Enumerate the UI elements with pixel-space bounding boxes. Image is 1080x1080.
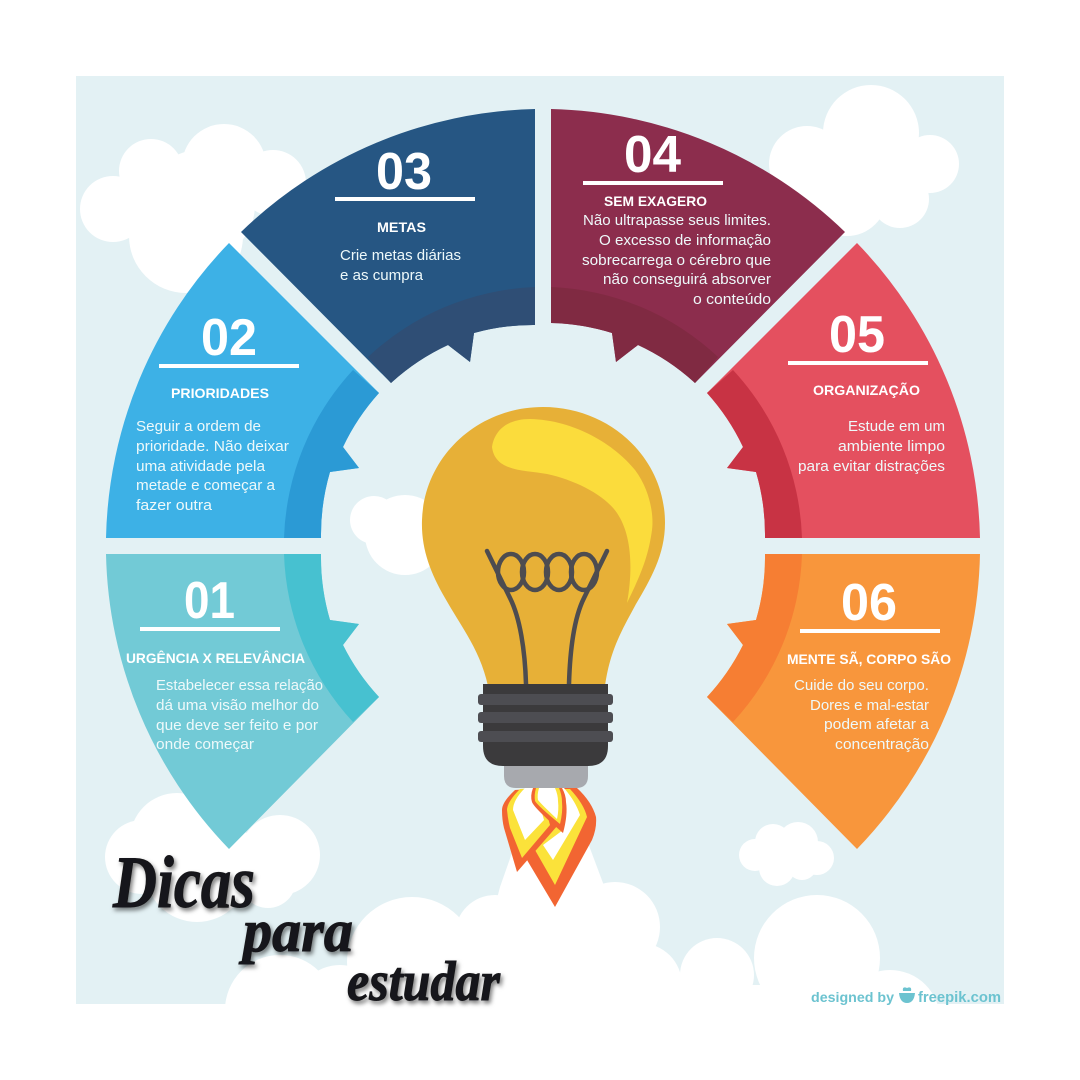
text 02: prioridade. Não deixar <box>136 438 289 455</box>
rule 03 <box>335 197 475 201</box>
text 01: onde começar <box>156 736 254 753</box>
flames <box>502 788 596 907</box>
text 05: ambiente limpo <box>838 438 945 455</box>
text 05 <box>798 418 945 475</box>
screw ridges <box>478 694 613 742</box>
rule 02 <box>159 364 299 368</box>
screw base <box>483 684 608 766</box>
number 04: 04 <box>624 126 681 184</box>
cloud: top left <box>80 124 306 293</box>
credit: designed by freepik: freepik.com <box>918 989 1001 1006</box>
neck <box>504 760 588 788</box>
rule 05 <box>788 361 928 365</box>
text 02: fazer outra <box>136 497 213 514</box>
number 02: 02 <box>201 309 257 367</box>
text 06: Cuide do seu corpo. <box>794 677 929 694</box>
icon: freepik logo <box>899 987 915 1003</box>
text 04: não conseguirá absorver <box>603 271 771 288</box>
rule 06 <box>800 629 940 633</box>
clouds <box>80 85 959 1070</box>
number 03: 03 <box>376 143 432 201</box>
cloud: bottom with rocket smoke <box>225 846 938 1004</box>
text 02: metade e começar a <box>136 477 276 494</box>
bulb glass <box>422 407 665 686</box>
background panel <box>76 76 1004 1004</box>
text 06: Dores e mal-estar <box>810 697 929 714</box>
text 03 <box>340 247 461 284</box>
text 02: Seguir a ordem de <box>136 418 261 435</box>
rule 01 <box>140 627 280 631</box>
text 01 <box>156 677 323 753</box>
number 01: 01 <box>184 572 235 630</box>
title 02: PRIORIDADES <box>171 385 269 401</box>
text 04 <box>582 212 771 308</box>
bulb highlight <box>492 419 652 603</box>
text 04: O excesso de informação <box>599 232 771 249</box>
title 06: MENTE SÃ, CORPO SÃO <box>787 650 951 667</box>
text 04: Não ultrapasse seus limites. <box>583 212 771 229</box>
credit: designed by freepik: designed by <box>811 989 894 1005</box>
credit: designed by freepik <box>811 987 1001 1006</box>
title 01: URGÊNCIA X RELEVÂNCIA <box>126 649 305 666</box>
text 01: que deve ser feito e por <box>156 717 318 734</box>
text 01: dá uma visão melhor do <box>156 697 319 714</box>
text 06: podem afetar a <box>824 716 930 733</box>
segment 03 <box>241 109 535 383</box>
segment 02 <box>106 243 379 538</box>
text 05: para evitar distrações <box>798 458 945 475</box>
title: Dicas para estudar <box>112 842 501 1013</box>
filament <box>487 551 607 684</box>
number 06: 06 <box>841 574 897 632</box>
segment 06 <box>707 554 980 849</box>
text 02: uma atividade pela <box>136 458 266 475</box>
segment 04 <box>551 109 845 383</box>
text 05: Estude em um <box>848 418 945 435</box>
title 05: ORGANIZAÇÃO <box>813 381 920 398</box>
text 01: Estabelecer essa relação <box>156 677 323 694</box>
text 06 <box>794 677 930 753</box>
title: Dicas para estudar: Dicas <box>112 842 255 924</box>
rule 04 <box>583 181 723 185</box>
text 04: sobrecarrega o cérebro que <box>582 252 771 269</box>
cloud: lower left <box>105 793 320 922</box>
cloud: behind bulb <box>350 495 430 575</box>
segment 01 <box>106 554 379 849</box>
icon: light bulb rocket <box>422 407 665 907</box>
title: Dicas para estudar: estudar <box>347 951 501 1013</box>
number 05: 05 <box>829 306 885 364</box>
cloud: top right <box>769 85 959 236</box>
title: Dicas para estudar: para <box>238 898 353 964</box>
text 03: e as cumpra <box>340 267 424 284</box>
text 04: o conteúdo <box>693 291 771 308</box>
title 04: SEM EXAGERO <box>604 193 707 209</box>
text 02 <box>136 418 289 514</box>
cloud: small right <box>739 822 834 886</box>
segment 05 <box>707 243 980 538</box>
text 06: concentração <box>835 736 929 753</box>
title 03: METAS <box>377 219 426 235</box>
text 03: Crie metas diárias <box>340 247 461 264</box>
